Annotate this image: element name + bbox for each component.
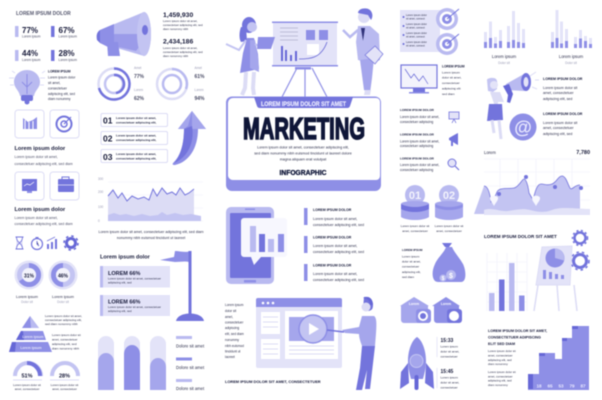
text: dolor sit amet block: LOREM IPSUM DOLOR SIT AMET, (488, 329, 547, 333)
rocket (400, 337, 434, 390)
houses with icons: Lorem (441, 302, 451, 306)
icon card: target (50, 110, 79, 138)
half donut 28%: Lorem ipsum dolor sit (51, 383, 79, 387)
icon: targets (436, 8, 459, 55)
pyramid chart: amet, consectetuer (52, 338, 78, 342)
text block: lorem ipsum dolor: Lorem ipsum dolor sit amet, (14, 155, 58, 159)
bar chart group 2: Lorem ipsum (559, 54, 584, 59)
monitor icon with text: adipiscing elit (442, 86, 461, 90)
description: Lorem ipsum dolor sit amet, consectetuer adipiscing elit, (257, 146, 349, 150)
chart caption: Lorem ipsum dolor sit amet, consectetuer adipiscing elit, sed diam (98, 230, 204, 234)
concentric donut left: Lorem (134, 88, 143, 92)
concentric donut left (98, 66, 145, 102)
flag goal panel: Lorem ipsum dolor (100, 254, 151, 260)
houses with icons: Lorem (409, 302, 419, 306)
stat 67%: Lorem ipsum (58, 34, 77, 38)
easel with pie chart (534, 246, 577, 311)
bullet list box: sit amet, consect (406, 44, 425, 48)
pyramid chart: sed diam nonummy nibh (45, 322, 78, 326)
icon: light bulb with text: diam nonummy (48, 97, 71, 101)
coin stacks 01 02: Lorem ipsum dolor sit (435, 224, 464, 228)
half donut 51%: Lorem ipsum dolor sit (13, 383, 41, 387)
stat numbers: 2,434,186 (163, 38, 193, 46)
description (254, 146, 352, 162)
stair chart: 18 (536, 384, 542, 388)
stat 44%: 44% (22, 49, 38, 58)
numbered list: Lorem ipsum dolor sit amet, (116, 152, 156, 156)
stat numbers: Lorem ipsum dolor sit amet, (163, 19, 198, 23)
money bag with text: dolor sit amet, (402, 260, 421, 264)
area line chart: 0 (98, 219, 100, 223)
flag goal panel: Lorem ipsum dolor sit amet, consectetuer (108, 276, 161, 280)
coin stacks 01 02: amet, consectetuer (436, 229, 462, 233)
list with icons: LOREM IPSUM DOLOR (400, 108, 435, 112)
illustration: woman with laptop (226, 17, 275, 95)
monitor icon with text (401, 64, 465, 96)
half donut 28% (50, 363, 79, 391)
icon: light bulb with text: adipiscing elit, sed (48, 92, 75, 96)
money bag with text (402, 243, 465, 282)
heading: lorem ipsum dolor sit amet: LOREM IPSUM DOLOR SIT AMET (484, 234, 557, 239)
text block: lorem ipsum dolor: Lorem ipsum dolor (14, 146, 66, 152)
numbered list: consectetuer adipiscing elit, (116, 156, 157, 160)
stat numbers: consectetuer adipiscing elit, sed (163, 50, 203, 54)
list with icons: consectetuer adipiscing (400, 120, 434, 124)
text blocks right of megaphone: Lorem ipsum dolor sit (543, 86, 577, 90)
flag goal panel: adipiscing elit, sed (108, 280, 132, 284)
donut captions (16, 295, 74, 304)
text: dolor sit amet block: amet, consectetuer (488, 374, 513, 378)
list with icons: consectetuer adipiscing (400, 144, 434, 148)
bar chart group 1: Dolor sit (498, 61, 510, 65)
text: dolor sit amet block: adipiscing elit, sed (488, 358, 512, 362)
donut captions: Lorem ipsum (16, 295, 38, 299)
stat 77% (15, 26, 41, 38)
chart caption: nonummy nibh euismod tincidunt ut laoreet (117, 236, 185, 240)
list with icons: Lorem ipsum dolor sit amet, (400, 115, 439, 119)
text block: lorem ipsum dolor (14, 146, 73, 166)
numbered list (101, 114, 168, 162)
concentric donut right: Lorem (194, 88, 204, 92)
icon: megaphone (97, 12, 151, 56)
stair chart (528, 326, 589, 390)
stat 67% (51, 26, 77, 38)
flag goal panel: LOREM 66% (108, 300, 141, 306)
text block: lorem ipsum dolor 2: Lorem ipsum dolor sit amet, (14, 216, 58, 220)
bar chart group 2: Dolor sit (565, 61, 577, 65)
money bag with text: LOREM IPSUM (402, 248, 423, 252)
monitor icon with text: consectetuer (442, 81, 460, 85)
donut captions: Dolor sit (57, 300, 69, 304)
heading: LOREM IPSUM DOLOR (16, 11, 71, 17)
text blocks right of megaphone: LOREM IPSUM DOLOR (543, 77, 583, 81)
text column beside browser: Lorem ipsum (225, 303, 244, 307)
concentric donut right: Amet (194, 66, 202, 70)
bullet list box: Lorem ipsum dolor (406, 23, 427, 26)
pyramid chart: Lorem ipsum (22, 335, 44, 339)
area line chart: 300 (98, 177, 104, 181)
pyramid chart: Lorem ipsum dolor sit (52, 333, 81, 337)
donut 31% (14, 260, 44, 290)
half donut 28%: amet, consectetuer (52, 387, 77, 391)
text: dolor sit amet block: Lorem ipsum dolor sit (488, 370, 516, 374)
flag goal panel (100, 251, 204, 321)
text: dolor sit amet block: diam nonummy (488, 362, 508, 366)
list with icons: consectetuer adipiscing (400, 168, 434, 172)
title panel (226, 96, 381, 191)
capsule chart legend: Dolore sit amet (176, 344, 205, 348)
text column beside browser (225, 303, 244, 359)
coin stacks 01 02 (401, 185, 464, 233)
bullet list box: sit amet, consect (406, 18, 425, 20)
text column beside browser: consectetuer (225, 320, 244, 324)
description: magna aliquam erat volutpat (280, 158, 326, 162)
text blocks right of megaphone: adipiscing elit, sed (543, 132, 572, 136)
numbered list: Lorem ipsum dolor sit amet, (116, 134, 156, 138)
half donut 28%: 28% (59, 374, 70, 380)
illustration: presentation board (272, 22, 338, 97)
money bag with text: Lorem ipsum (402, 254, 420, 258)
text blocks right of megaphone (543, 77, 583, 136)
text blocks right of megaphone: amet, consectetuer (543, 91, 574, 95)
stat numbers: 1,459,930 (163, 12, 193, 19)
three text rows: LOREM IPSUM DOLOR (313, 264, 352, 268)
area line chart: 200 (98, 190, 104, 194)
text block: lorem ipsum dolor 2 (14, 207, 73, 226)
stat 67%: 67% (58, 26, 75, 35)
capsule chart legend: Dolore sit amet (176, 365, 205, 370)
coin stacks 01 02: Lorem ipsum dolor sit (401, 224, 430, 228)
money bag with text: sed diam (402, 275, 415, 279)
time entries: Lorem ipsum (440, 344, 458, 348)
pyramid chart: Lorem ipsum (20, 346, 42, 350)
concentric donut right: 61% (194, 74, 205, 80)
donut captions: Dolor sit (21, 300, 33, 304)
three text rows: LOREM IPSUM DOLOR (313, 236, 352, 240)
browser window with play (256, 298, 342, 368)
stat 44%: Lorem ipsum (22, 58, 41, 62)
text block: lorem ipsum dolor 2: consectetuer adipiscing elit, sed diam (14, 222, 73, 226)
icon: light bulb with text (9, 70, 76, 104)
three text rows: Lorem ipsum dolor sit amet, (313, 244, 357, 248)
title tab: LOREM IPSUM DOLOR SIT AMET (261, 101, 346, 108)
area chart: Lorem (484, 150, 496, 155)
half donut 51% (13, 363, 42, 391)
phone with chart bubble (226, 207, 287, 284)
flag goal panel: adipiscing elit, sed (108, 309, 132, 313)
flag goal panel: LOREM 66% (108, 271, 141, 277)
list with icons: LOREM IPSUM DOLOR (400, 156, 435, 160)
three text rows: consectetuer adipiscing elit, sed (313, 250, 364, 254)
time entries: Lorem ipsum (440, 376, 458, 380)
caption: LOREM IPSUM DOLOR SIT AMET, CONSECTETUER (225, 379, 321, 384)
text: dolor sit amet block: Lorem ipsum dolor sit (488, 349, 516, 353)
text column beside browser: adipiscing (225, 326, 239, 330)
person holding magnifier (327, 297, 376, 390)
subtitle: INFOGRAPHIC (280, 168, 327, 177)
concentric donut left: Amet (134, 66, 142, 70)
stat 28%: 28% (58, 49, 75, 58)
time entries (437, 337, 460, 390)
concentric donut right: 94% (194, 96, 205, 102)
stair chart: 87 (580, 384, 586, 388)
gears (571, 230, 589, 270)
icon: light bulb with text: sit amet, (48, 81, 61, 85)
donut 46%: 46% (58, 274, 69, 280)
text block: lorem ipsum dolor 2: Lorem ipsum dolor (14, 207, 66, 213)
text block: lorem ipsum dolor: consectetuer adipiscing elit, sed diam (14, 162, 73, 166)
pyramid chart: Lorem ipsum dolor sit amet, (45, 314, 82, 318)
icon: light bulb with text: Lorem ipsum dolor (48, 76, 76, 80)
stat 44% (15, 49, 41, 62)
donut captions: Lorem ipsum (52, 295, 74, 299)
concentric donut left: 77% (134, 74, 145, 80)
stat numbers (163, 12, 203, 58)
monitor icon with text: dolor sit amet, (442, 76, 462, 80)
icons: hourglass stopwatch bars gear (16, 236, 78, 250)
time entries: 15:45 (440, 369, 454, 375)
bullet list box (400, 10, 440, 52)
text: dolor sit amet block: amet, consectetuer (488, 354, 513, 358)
bullet list box: sit amet, consect (406, 36, 425, 38)
stat 77%: 77% (22, 26, 38, 35)
bar chart group 1: Lorem ipsum (492, 54, 517, 59)
area line chart (98, 177, 203, 223)
time entries: consectetuer (440, 386, 458, 390)
title tab (254, 97, 353, 108)
monitor icon with text: Lorem ipsum (442, 70, 460, 74)
numbered list: consectetuer adipiscing elit, (116, 120, 157, 124)
text: dolor sit amet block: ELIT SED DIAM (488, 342, 515, 346)
bullet list box: Lorem ipsum dolor (406, 41, 427, 44)
text column beside browser: elit, sed diam (225, 332, 244, 336)
text column beside browser: laoreet (225, 355, 235, 359)
numbered list: 03 (103, 152, 113, 162)
coin stacks 01 02: amet, consectetuer (402, 229, 428, 233)
bar chart (487, 253, 527, 311)
coin stacks 01 02: 02 (443, 190, 455, 202)
area line chart: 100 (98, 205, 104, 209)
icon: at sign (510, 114, 536, 140)
stair chart: 53 (558, 384, 564, 388)
pyramid chart: consectetuer adipiscing elit, (45, 318, 82, 322)
numbered list: 01 (103, 116, 113, 126)
illustration: man (343, 8, 383, 95)
text blocks right of megaphone: Lorem ipsum dolor sit (543, 121, 577, 125)
area chart (474, 150, 590, 215)
title: MARKETING (243, 111, 365, 146)
text column beside browser: dolor sit (225, 309, 236, 313)
concentric donut right (157, 66, 205, 102)
capsule chart legend (176, 336, 205, 391)
donut 31%: 31% (24, 274, 35, 280)
time entries: dolor sit amet, (440, 350, 460, 354)
time entries: 15:33 (440, 338, 454, 344)
text blocks right of megaphone: amet, consectetuer (543, 126, 574, 130)
capsule chart legend: Dolore sit amet (176, 386, 205, 391)
stat 28%: Lorem ipsum (58, 58, 77, 62)
text column beside browser: tincidunt ut (225, 350, 241, 354)
bullet list box: Lorem ipsum dolor (406, 14, 427, 17)
stat 28% (51, 49, 77, 62)
money bag with text: $ (449, 273, 453, 280)
icon: at sign: @ (514, 118, 532, 138)
list with icons: Lorem ipsum dolor sit amet, (400, 140, 439, 144)
money bag with text: consectetuer (402, 264, 419, 268)
text blocks right of megaphone: LOREM IPSUM DOLOR (543, 112, 583, 116)
bullet list box: Lorem ipsum dolor (406, 32, 427, 35)
half donut 51%: amet, consectetuer (15, 387, 39, 391)
list with icons (400, 108, 459, 172)
three text rows: Lorem ipsum dolor sit amet, (313, 217, 357, 221)
time entries: consectetuer (440, 354, 458, 358)
stat numbers: diam nonummy nibh (163, 27, 189, 31)
icon card: briefcase (50, 172, 79, 200)
pyramid chart: diam nonummy nibh (52, 346, 79, 350)
stair chart: 79 (569, 384, 575, 388)
stat numbers: Lorem ipsum dolor sit amet, (163, 46, 198, 50)
text column beside browser: amet, (225, 315, 233, 319)
numbered list: Lorem ipsum dolor sit amet, (116, 116, 156, 120)
houses with icons (400, 297, 462, 323)
pyramid chart: adipiscing elit, sed (52, 342, 77, 346)
icon: light bulb with text: LOREM IPSUM (48, 70, 71, 74)
stat numbers: consectetuer adipiscing elit, sed (163, 23, 203, 27)
three text rows: Lorem ipsum dolor sit amet, (313, 272, 357, 276)
flag goal panel: Lorem ipsum dolor sit amet, consectetuer (108, 305, 161, 309)
concentric donut left: 62% (134, 96, 145, 102)
icon card: monitor (15, 172, 44, 200)
donut 46% (48, 260, 78, 290)
text: dolor sit amet block: diam nonummy (488, 383, 508, 387)
woman with megaphone (487, 72, 539, 139)
text blocks right of megaphone: adipiscing elit, sed (543, 97, 572, 101)
numbered list: consectetuer adipiscing elit, (116, 138, 157, 142)
text column beside browser: nibh euismod (225, 344, 244, 348)
text column beside browser: nonummy (225, 338, 239, 342)
three text rows: consectetuer adipiscing elit, sed (313, 223, 364, 227)
chart caption (98, 230, 204, 240)
money bag with text: adipiscing elit, (402, 270, 421, 274)
three text rows: LOREM IPSUM DOLOR (313, 208, 352, 212)
half donut 51%: 51% (21, 374, 33, 380)
bullet list box: sit amet, consect (406, 26, 425, 30)
pyramid chart (9, 314, 82, 352)
monitor icon with text: sed diam (442, 92, 455, 96)
description: sed diam nonummy nibh euismod tincidunt ut laoreet dolore (254, 152, 352, 156)
list with icons: LOREM IPSUM DOLOR (400, 132, 435, 136)
money bag with text: $ (442, 276, 445, 282)
capsule bar chart (98, 336, 166, 390)
bar chart group 2 (551, 10, 592, 65)
three text rows (304, 208, 364, 282)
area chart: 7,780 (576, 150, 590, 156)
icon: light bulb with text: consectetuer (48, 86, 68, 90)
monitor icon with text: LOREM IPSUM (442, 64, 465, 68)
arrow up (173, 111, 206, 165)
panel: stats top-left (15, 11, 77, 62)
icon card: chart (15, 110, 44, 138)
text: dolor sit amet block: adipiscing elit, sed (488, 378, 512, 382)
coin stacks 01 02: 01 (409, 190, 421, 202)
stat 77%: Lorem ipsum (22, 34, 41, 38)
numbered list: 02 (103, 134, 113, 144)
bar chart group 1 (484, 11, 525, 65)
text: dolor sit amet block (488, 329, 547, 387)
stair chart: 65 (547, 384, 553, 388)
three text rows: consectetuer adipiscing elit, sed (313, 278, 364, 282)
text: dolor sit amet block: CONSECTETUER ADIPISCING (488, 336, 541, 340)
time entries: dolor sit amet, (440, 380, 460, 384)
stat numbers: diam nonummy nibh (163, 54, 189, 58)
list with icons: Lorem ipsum dolor sit amet, (400, 163, 439, 167)
